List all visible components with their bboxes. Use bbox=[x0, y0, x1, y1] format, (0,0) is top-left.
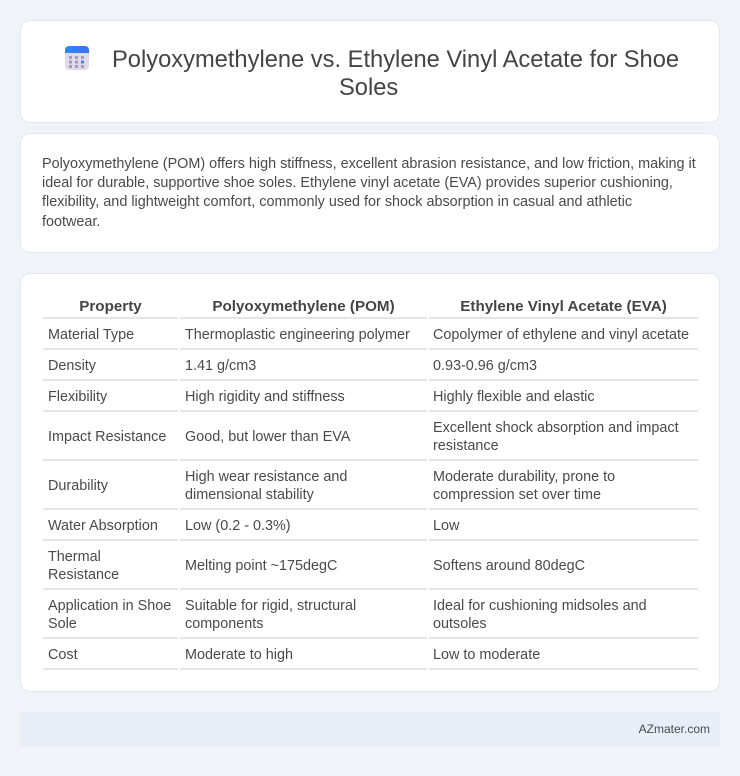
row: cost bbox=[48, 647, 540, 663]
row: material type: Material Type bbox=[48, 327, 134, 343]
row: density: 1.41 g/cm3 bbox=[185, 358, 256, 374]
column headers bbox=[79, 298, 667, 315]
row: impact resistance: Good, but lower than EVA bbox=[185, 429, 350, 445]
table card bbox=[20, 273, 720, 692]
row: material type bbox=[48, 327, 689, 343]
row: impact resistance: Impact Resistance bbox=[48, 429, 166, 445]
row: durability: Durability bbox=[48, 478, 108, 494]
row: application in shoe sole: Suitable for rigid, structural bbox=[185, 598, 356, 614]
row: durability: High wear resistance and bbox=[185, 469, 347, 485]
row: water absorption: Low (0.2 - 0.3%) bbox=[185, 518, 291, 534]
row: application in shoe sole: Ideal for cushioning midsoles and bbox=[433, 598, 647, 614]
row: durability: compression set over time bbox=[433, 487, 601, 503]
row: application in shoe sole: components bbox=[185, 616, 263, 632]
row: water absorption: Water Absorption bbox=[48, 518, 158, 534]
row: water absorption: Low bbox=[433, 518, 459, 534]
row: durability bbox=[48, 469, 615, 503]
row: impact resistance bbox=[48, 420, 679, 454]
column headers: Ethylene Vinyl Acetate (EVA) bbox=[460, 298, 667, 315]
row: application in shoe sole: Application in Shoe bbox=[48, 598, 171, 614]
row: thermal resistance: Melting point ~175degC bbox=[185, 558, 337, 574]
intro card bbox=[20, 133, 720, 253]
title: Soles bbox=[339, 75, 398, 101]
row: durability: dimensional stability bbox=[185, 487, 314, 503]
row: thermal resistance: Thermal bbox=[48, 549, 101, 565]
row: density: Density bbox=[48, 358, 96, 374]
intro text: ideal for durable, supportive shoe soles. Ethylene vinyl acetate (EVA) provides superior cushioning, bbox=[42, 175, 673, 191]
row: impact resistance: resistance bbox=[433, 438, 499, 454]
row: material type: Thermoplastic engineering polymer bbox=[185, 327, 410, 343]
row: flexibility: Flexibility bbox=[48, 389, 107, 405]
icon: calendar bbox=[65, 46, 89, 70]
row: cost: Moderate to high bbox=[185, 647, 293, 663]
row: cost: Low to moderate bbox=[433, 647, 540, 663]
row: application in shoe sole bbox=[48, 598, 647, 632]
intro text: flexibility, and lightweight comfort, commonly used for shock absorption in casual and athletic bbox=[42, 194, 632, 210]
title bbox=[112, 46, 679, 101]
row: flexibility: High rigidity and stiffness bbox=[185, 389, 345, 405]
footer bar bbox=[20, 712, 720, 746]
comparison table bbox=[43, 298, 698, 670]
footer source text: AZmater.com bbox=[639, 722, 710, 736]
column headers: Property bbox=[79, 298, 142, 315]
intro text bbox=[42, 156, 696, 230]
row: material type: Copolymer of ethylene and vinyl acetate bbox=[433, 327, 689, 343]
row: flexibility bbox=[48, 389, 595, 405]
row: thermal resistance: Resistance bbox=[48, 567, 119, 583]
title: Polyoxymethylene vs. Ethylene Vinyl Acetate for Shoe bbox=[112, 46, 679, 72]
row: cost: Cost bbox=[48, 647, 78, 663]
row: application in shoe sole: outsoles bbox=[433, 616, 487, 632]
row: impact resistance: Excellent shock absorption and impact bbox=[433, 420, 679, 436]
row: flexibility: Highly flexible and elastic bbox=[433, 389, 595, 405]
intro text: footwear. bbox=[42, 214, 100, 230]
row: application in shoe sole: Sole bbox=[48, 616, 77, 632]
row: durability: Moderate durability, prone to bbox=[433, 469, 615, 485]
row: thermal resistance bbox=[48, 549, 585, 583]
intro text: Polyoxymethylene (POM) offers high stiffness, excellent abrasion resistance, and low friction, making it bbox=[42, 156, 696, 172]
row: water absorption bbox=[48, 518, 460, 534]
row: thermal resistance: Softens around 80degC bbox=[433, 558, 585, 574]
column headers: Polyoxymethylene (POM) bbox=[212, 298, 395, 315]
row: density: 0.93-0.96 g/cm3 bbox=[433, 358, 537, 374]
row: density bbox=[48, 358, 537, 374]
header card bbox=[20, 20, 720, 123]
